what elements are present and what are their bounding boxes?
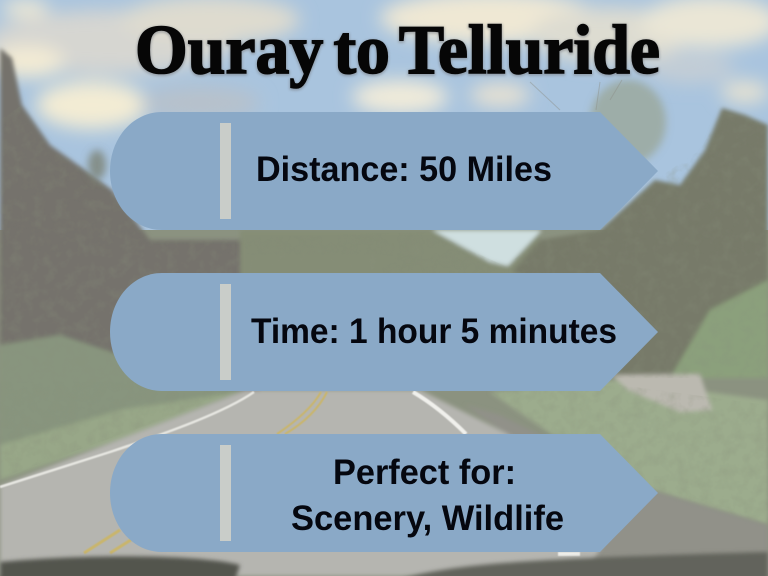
text: perfect for: Perfect for: (333, 453, 516, 492)
title: Ouray to Telluride (135, 13, 660, 90)
road (0, 390, 768, 576)
text: time: Time: 1 hour 5 minutes (251, 312, 617, 351)
dashboard edge (0, 552, 768, 576)
divider bar: perfect for (220, 445, 231, 541)
arrow shape: distance (110, 112, 658, 230)
road markings (0, 392, 580, 556)
right hillside (490, 108, 768, 525)
foliage texture (481, 134, 729, 452)
forest band (240, 230, 542, 280)
title: Ouray to Telluride (135, 12, 660, 89)
left hillside (0, 48, 260, 480)
panel: perfect for (110, 434, 658, 552)
arrow shape: time (110, 273, 658, 391)
text: distance: Distance: 50 Miles (256, 150, 552, 189)
divider bar: time (220, 284, 231, 380)
trees and bare branches (88, 80, 666, 180)
text: perfect for (291, 453, 564, 538)
text: perfect for: Scenery, Wildlife (291, 499, 564, 538)
panel: time (110, 273, 658, 391)
arrow shape: perfect for (110, 434, 658, 552)
panel: distance (110, 112, 658, 230)
divider bar: distance (220, 123, 231, 219)
